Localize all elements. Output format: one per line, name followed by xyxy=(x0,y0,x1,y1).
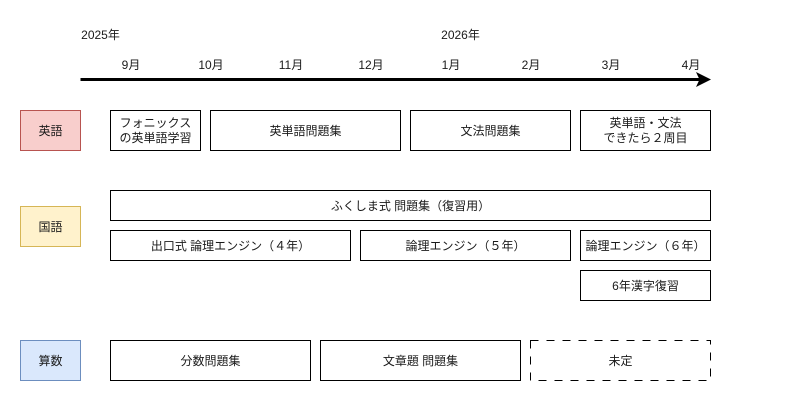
month labels: 11月 xyxy=(279,58,303,72)
box: phonics: フォニックス xyxy=(120,116,191,130)
box: phonics xyxy=(110,110,200,150)
timeline xyxy=(80,28,711,87)
box: vocabulary workbook xyxy=(210,110,400,150)
subject label: Japanese xyxy=(20,206,80,246)
box: grade 6 kanji review: 6年漢字復習 xyxy=(612,278,679,293)
row: Japanese xyxy=(20,190,710,300)
box: Fukushima workbook xyxy=(110,190,710,220)
box: word problems workbook: 文章題 問題集 xyxy=(383,353,458,368)
box: grammar workbook: 文法問題集 xyxy=(460,123,521,138)
month labels: 1月 xyxy=(442,58,460,72)
year label 2025: 2025年 xyxy=(81,28,120,42)
box: vocabulary workbook: 英単語問題集 xyxy=(269,123,342,138)
box: second pass: 英単語・文法 xyxy=(609,116,682,130)
box: grade 6 kanji review xyxy=(580,270,710,300)
timeline arrow xyxy=(80,72,711,87)
row: English xyxy=(20,110,710,150)
box: logic engine grade 5: 論理エンジン（５年） xyxy=(405,238,526,253)
box: logic engine grade 5 xyxy=(360,230,570,260)
row: Math xyxy=(20,340,710,380)
box: logic engine grade 6 xyxy=(580,230,710,260)
box: second pass xyxy=(580,110,710,150)
month labels: 4月 xyxy=(682,58,700,72)
subject label: Math xyxy=(20,340,80,380)
box: word problems workbook xyxy=(320,340,520,380)
month labels: 2月 xyxy=(522,58,540,72)
box: Fukushima workbook: ふくしま式 問題集（復習用） xyxy=(331,198,490,213)
box: undecided: 未定 xyxy=(608,354,633,368)
box: undecided xyxy=(530,340,710,380)
box: phonics: の英単語学習 xyxy=(119,130,192,145)
subject label: English: 英語 xyxy=(38,124,63,138)
month labels: 9月 xyxy=(122,58,140,72)
box: grammar workbook xyxy=(410,110,570,150)
box: logic engine grade 6: 論理エンジン（６年） xyxy=(585,238,706,253)
month labels: 3月 xyxy=(602,58,620,72)
subject label: English xyxy=(20,110,80,150)
box: fractions workbook xyxy=(110,340,310,380)
month labels: 12月 xyxy=(358,58,384,72)
year label 2026: 2026年 xyxy=(441,28,480,42)
subject label: Math: 算数 xyxy=(38,353,63,368)
month labels xyxy=(122,58,700,72)
box: logic engine grade 4: 出口式 論理エンジン（４年） xyxy=(151,238,310,253)
subject label: Japanese: 国語 xyxy=(38,220,63,234)
box: second pass: できたら２周目 xyxy=(603,131,688,145)
month labels: 10月 xyxy=(198,58,224,72)
box: fractions workbook: 分数問題集 xyxy=(180,353,241,368)
box: logic engine grade 4 xyxy=(110,230,350,260)
